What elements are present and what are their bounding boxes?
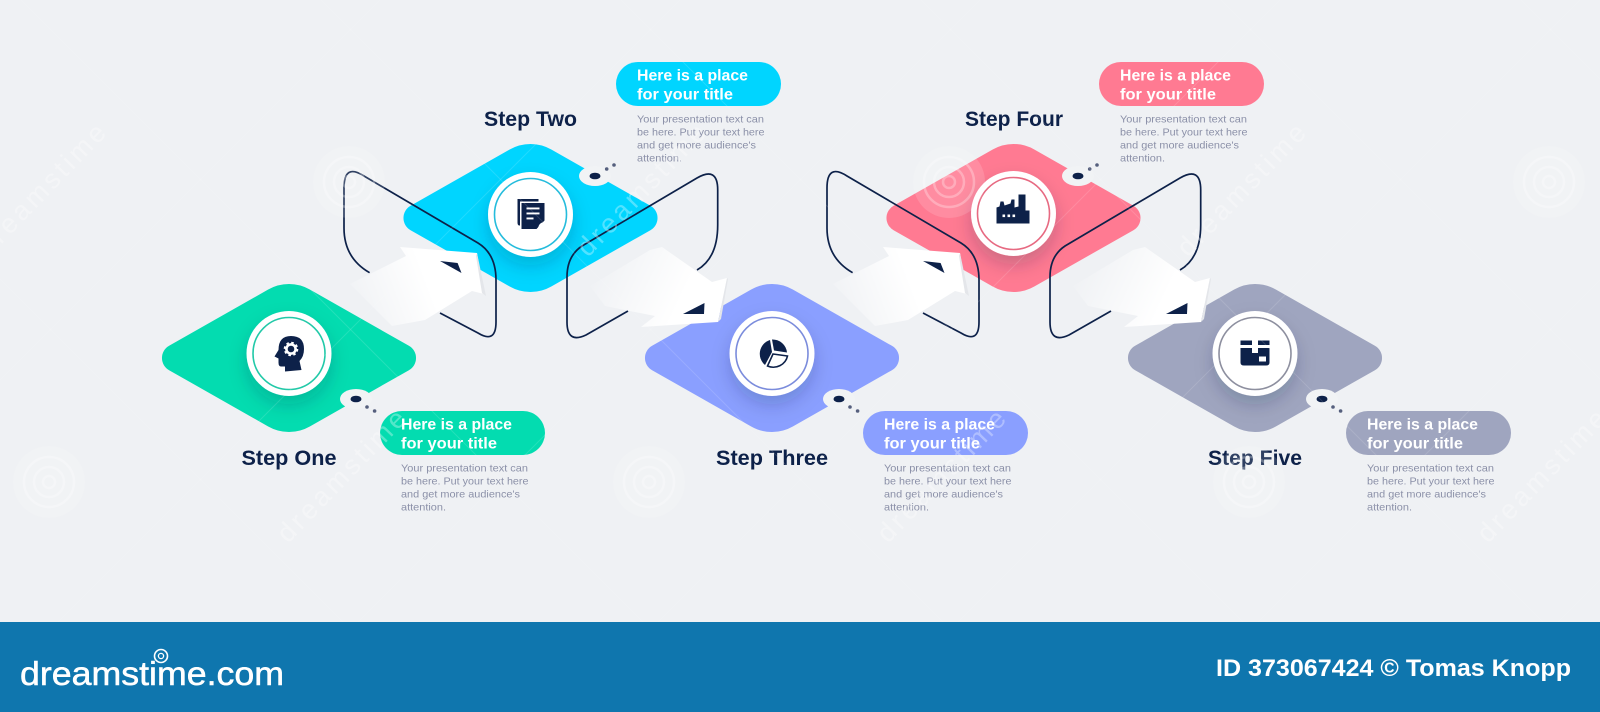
diamond: step four [886, 144, 1141, 292]
connector dots: step one [340, 389, 376, 413]
callout: step three: for your title [884, 436, 980, 452]
callout: step one [380, 411, 545, 514]
callout: step four: Here is a place [1120, 68, 1231, 84]
callout: step five: for your title [1367, 436, 1463, 452]
callout: step five: and get more audience's [1367, 489, 1486, 501]
badge: step two document icon [488, 172, 573, 257]
callout: step three: attention. [884, 502, 929, 514]
connector dots: step two [579, 163, 616, 186]
callout: step four: be here. Put your text here [1120, 127, 1248, 139]
step label: Step Five: Step Five [1208, 447, 1302, 470]
callout: step four: attention. [1120, 152, 1165, 164]
arrow: step four to step five [1073, 247, 1211, 327]
watermark: spiral marks [13, 146, 1585, 518]
diamond: step two [403, 144, 658, 292]
arrow: step three to step four [833, 247, 969, 326]
callout: step three: Here is a place [884, 416, 995, 434]
callout: step two: Here is a place [637, 68, 748, 84]
callout: step two: for your title [637, 86, 733, 104]
callout: step one: attention. [401, 502, 446, 514]
watermark: diagonal text: dreamstime [1171, 118, 1312, 262]
callout: step five: attention. [1367, 502, 1412, 514]
footer logo: dreamstime.com [20, 655, 284, 692]
callout: step two [616, 62, 781, 164]
diamond: step five [1128, 284, 1382, 432]
callout: step one: for your title [401, 436, 497, 452]
step label: Step Three: Step Three [716, 447, 828, 470]
watermark: lattice lines [258, 62, 1470, 510]
watermark: diagonal text: dreamstime [871, 404, 1012, 548]
connector dots: step three [823, 389, 859, 413]
outline: connector frame one [344, 172, 496, 337]
badge: step four factory icon [971, 171, 1056, 256]
outline: connector frame three [827, 172, 979, 337]
callout: step one: Here is a place [401, 416, 512, 434]
badge: step five box icon [1212, 311, 1298, 396]
callout: step four [1099, 62, 1264, 164]
callout: step four: Your presentation text can [1120, 114, 1247, 126]
watermark: diagonal text [0, 118, 1600, 548]
watermark: diagonal text: dreamstime [571, 118, 712, 262]
diamond: step one [162, 284, 416, 432]
outline: connector frame two [567, 174, 718, 338]
callout: step five: Here is a place [1367, 416, 1478, 434]
callout: step three: be here. Put your text here [884, 476, 1012, 488]
callout: step two: be here. Put your text here [637, 127, 765, 139]
badge: step three pie chart icon [730, 311, 814, 396]
connector dots: step four [1062, 163, 1099, 186]
callout: step three [863, 411, 1028, 514]
callout: step five [1346, 411, 1511, 514]
footer credit: ID 373067424 © Tomas Knopp [1216, 655, 1571, 682]
callout: step one: be here. Put your text here [401, 476, 529, 488]
callout: step five: be here. Put your text here [1367, 476, 1495, 488]
outline: connector frame four [1050, 174, 1201, 338]
callout: step three: Your presentation text can [884, 463, 1011, 475]
callout: step four: for your title [1120, 86, 1216, 104]
callout: step five: Your presentation text can [1367, 463, 1494, 475]
arrow: step one to step two [350, 247, 486, 326]
callout: step three: and get more audience's [884, 489, 1003, 501]
diamond: step three [645, 284, 899, 432]
callout: step one: and get more audience's [401, 489, 520, 501]
callout: step two: attention. [637, 152, 682, 164]
watermark: diagonal text: dreamstime [271, 404, 412, 548]
connector dots: step five [1306, 389, 1342, 413]
step label: Step Four: Step Four [965, 108, 1063, 131]
callout: step two: Your presentation text can [637, 114, 764, 126]
footer band [0, 622, 1600, 712]
badge: step one head icon [246, 311, 332, 396]
step label: Step Two: Step Two [484, 108, 577, 131]
callout: step four: and get more audience's [1120, 140, 1239, 152]
step label: Step One: Step One [242, 447, 336, 470]
callout: step one: Your presentation text can [401, 463, 528, 475]
callout: step two: and get more audience's [637, 140, 756, 152]
arrow: step two to step three [590, 247, 728, 327]
